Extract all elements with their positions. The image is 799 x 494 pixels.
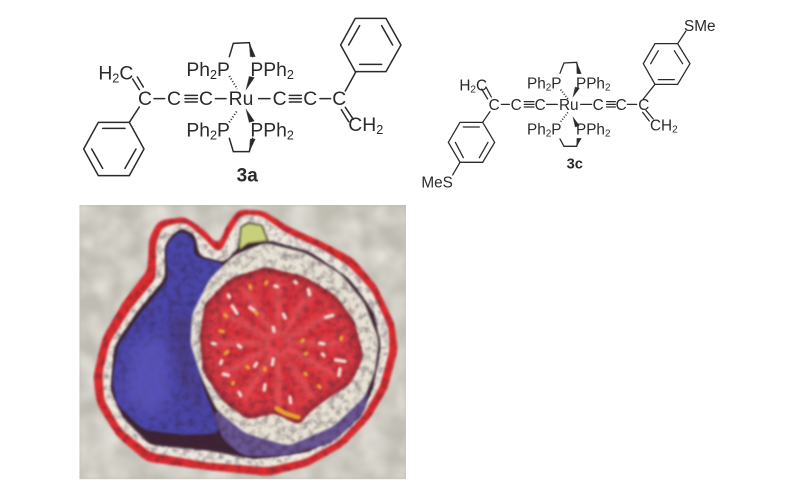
labels 3a: C bbox=[199, 89, 213, 110]
labels 3a: 3a bbox=[237, 166, 258, 187]
red felt outline bbox=[93, 209, 398, 476]
labels 3c: 3c bbox=[567, 156, 583, 172]
labels 3c: Ru bbox=[559, 97, 579, 114]
pulp seeds bbox=[212, 282, 345, 417]
labels 3c: P bbox=[551, 75, 562, 92]
labels 3c: Ph bbox=[527, 75, 546, 92]
labels 3a: C bbox=[167, 89, 181, 110]
labels 3a: PPh bbox=[250, 121, 287, 142]
dark outline of fig bbox=[110, 227, 381, 459]
fig skin lower rim: dusky purple bbox=[210, 385, 370, 456]
labels 3c: MeS bbox=[421, 175, 453, 192]
chemical structure 3c bbox=[421, 18, 716, 192]
labels 3a: 2 bbox=[112, 72, 119, 86]
labels 3a: C bbox=[273, 89, 287, 110]
labels 3c bbox=[421, 18, 716, 192]
fig skin: blue purple bbox=[112, 230, 227, 435]
labels 3c: C bbox=[535, 97, 546, 114]
labels 3c: H bbox=[459, 77, 470, 94]
chemical structure 3a bbox=[84, 18, 401, 187]
labels 3a: H bbox=[98, 64, 112, 85]
labels 3a: PPh bbox=[250, 60, 287, 81]
labels 3c: 2 bbox=[546, 129, 552, 140]
labels 3c: SMe bbox=[684, 18, 716, 35]
labels 3a: C bbox=[138, 89, 152, 110]
pulp thread rays bbox=[218, 282, 338, 405]
red pulp bbox=[201, 268, 362, 424]
right phenyl ring bbox=[341, 18, 401, 72]
figure canvas bbox=[79, 18, 715, 480]
labels 3a bbox=[98, 60, 383, 187]
labels 3c: 2 bbox=[470, 85, 476, 96]
felt background bbox=[79, 205, 406, 479]
bonds 3c bbox=[482, 62, 655, 146]
labels 3c: 2 bbox=[672, 125, 678, 136]
labels 3c: CH bbox=[650, 117, 672, 134]
labels 3a: C bbox=[119, 64, 133, 85]
bonds 3a bbox=[129, 43, 356, 152]
labels 3a: 2 bbox=[210, 129, 217, 143]
yellow-green stem bbox=[239, 223, 268, 251]
labels 3a: C bbox=[332, 89, 346, 110]
labels 3c: P bbox=[551, 121, 562, 138]
labels 3c: 2 bbox=[546, 83, 552, 94]
labels 3c: C bbox=[616, 97, 627, 114]
left phenyl ring bbox=[84, 122, 144, 176]
labels 3c: 2 bbox=[605, 83, 611, 94]
labels 3c: C bbox=[511, 97, 522, 114]
labels 3a: 2 bbox=[210, 68, 217, 82]
labels 3c: C bbox=[476, 77, 487, 94]
labels 3a: 2 bbox=[376, 123, 383, 137]
labels 3a: Ph bbox=[186, 121, 210, 142]
labels 3a: Ru bbox=[229, 89, 253, 110]
cut fig white flesh ring bbox=[190, 243, 379, 446]
labels 3a: Ph bbox=[186, 60, 210, 81]
labels 3a: P bbox=[217, 121, 230, 142]
labels 3a: CH bbox=[348, 115, 376, 136]
labels 3a: 2 bbox=[287, 129, 294, 143]
right thiomethylphenyl ring bbox=[643, 31, 690, 84]
white thread border bbox=[102, 215, 390, 467]
labels 3a: P bbox=[217, 60, 230, 81]
labels 3c: C bbox=[593, 97, 604, 114]
labels 3c: 2 bbox=[605, 129, 611, 140]
labels 3a: C bbox=[303, 89, 317, 110]
labels 3c: C bbox=[638, 97, 649, 114]
labels 3a: 2 bbox=[287, 68, 294, 82]
labels 3c: PPh bbox=[576, 75, 605, 92]
left thiomethylphenyl ring bbox=[448, 122, 495, 175]
photo: embroidered fig bbox=[79, 205, 406, 479]
labels 3c: C bbox=[489, 97, 500, 114]
labels 3c: PPh bbox=[576, 121, 605, 138]
labels 3c: Ph bbox=[527, 121, 546, 138]
